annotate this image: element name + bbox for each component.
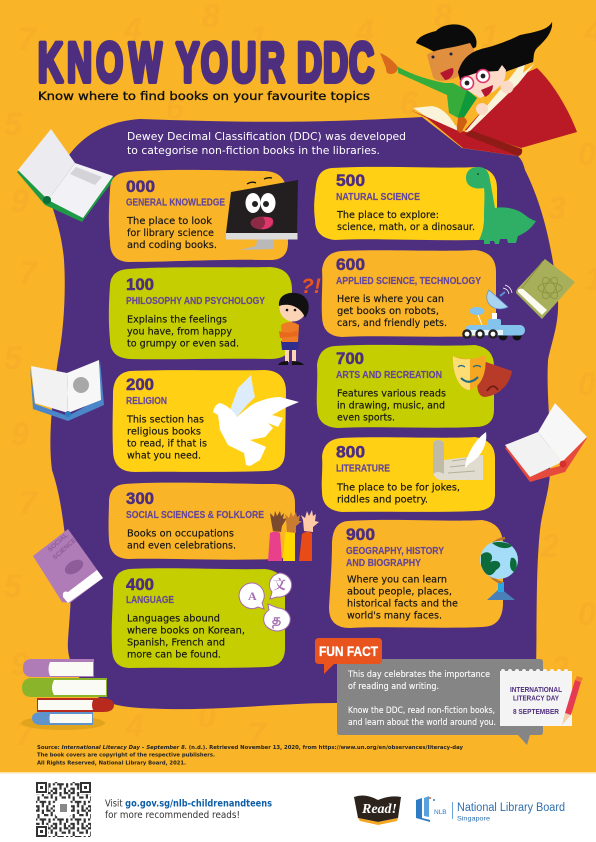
icon: scroll and quill [433, 432, 486, 480]
icon: language speech bubbles: 文 [273, 574, 286, 593]
poster: 6 [166, 90, 184, 126]
icon: thinking boy: ?! [301, 275, 321, 298]
National Library Board logo: National Library Board [457, 802, 565, 814]
card 200 religion: 200 [126, 376, 154, 394]
card 500 natural science: science, math, or a dinosaur. [337, 222, 475, 233]
card 600 applied science, technology: cars, and friendly pets. [337, 318, 447, 329]
icon: red pencil [562, 676, 583, 725]
card 800 literature: The place to be for jokes, [336, 482, 460, 494]
card 800 literature [322, 432, 495, 512]
poster: 5 [4, 106, 23, 142]
card 100 philosophy and psychology: PHILOSOPHY AND PSYCHOLOGY [126, 296, 265, 307]
card 400 language: LANGUAGE [126, 595, 174, 606]
visit text: Visit go.gov.sg/nlb-childrenandteens [105, 798, 272, 810]
card 900 geography, history and biography [329, 520, 518, 628]
card 800 literature: LITERATURE [336, 464, 390, 474]
title: KNOW YOUR DDC [38, 31, 374, 94]
poster: 1 [481, 18, 499, 54]
QR code [36, 782, 92, 838]
card 300 social sciences and folklore: Books on occupations [127, 528, 234, 540]
poster: 4 [125, 708, 144, 744]
Read! logo [354, 796, 401, 825]
card 400 language: where books on Korean, [127, 626, 245, 636]
illustration: blue open book [30, 360, 104, 421]
card 500 natural science: NATURAL SCIENCE [336, 192, 420, 203]
subtitle: Know where to find books on your favourite topics [38, 89, 370, 103]
card 000 general knowledge: GENERAL KNOWLEDGE [126, 198, 225, 208]
card 200 religion: religious books [127, 426, 201, 438]
visit text [105, 798, 272, 821]
card 000 general knowledge: for library science [127, 228, 214, 239]
icon: green dinosaur [466, 167, 536, 244]
illustration: green open book [17, 129, 115, 222]
icon: thinking boy [278, 275, 321, 365]
poster: 9 [11, 183, 29, 219]
Read! logo: Read! [361, 802, 397, 817]
poster: 6 [400, 85, 418, 121]
card 300 social sciences and folklore: 300 [126, 490, 154, 508]
poster: 3 [548, 190, 566, 226]
visit text: for more recommended reads! [105, 810, 240, 821]
illustration: science book [516, 259, 575, 319]
grey fact panel: Know the DDC, read non-fiction books, [348, 706, 495, 716]
poster: 0 [578, 366, 596, 402]
fun fact tag: FUN FACT [319, 643, 378, 659]
intro text: to categorise non-fiction books in the libraries. [127, 145, 380, 157]
card 600 applied science, technology [322, 250, 525, 340]
grey fact panel [337, 659, 543, 745]
card 300 social sciences and folklore: and even celebrations. [127, 540, 236, 552]
card 700 arts and recreation: Features various reads [337, 388, 446, 400]
poster: 7 [16, 716, 36, 752]
card 400 language: Spanish, French and [127, 638, 225, 648]
note: international literacy day: 8 SEPTEMBER [513, 707, 559, 716]
card 800 literature: riddles and poetry. [337, 494, 428, 506]
card 700 arts and recreation: 700 [336, 350, 364, 368]
poster: 0 [198, 698, 216, 734]
note: international literacy day: LITERACY DAY [513, 694, 559, 702]
card 100 philosophy and psychology: to grumpy or even sad. [127, 338, 239, 350]
note: international literacy day [500, 669, 583, 726]
card 000 general knowledge: 000 [126, 178, 155, 196]
card 700 arts and recreation: in drawing, music, and [337, 400, 445, 412]
card 900 geography, history and biography: Where you can learn [347, 574, 447, 586]
card 500 natural science: The place to explore: [336, 210, 439, 221]
poster: 7 [18, 21, 38, 57]
card 000 general knowledge [109, 170, 298, 262]
card 500 natural science [314, 167, 536, 244]
poster: 0 [578, 136, 596, 172]
source credits [37, 745, 464, 766]
National Library Board logo: NLB [434, 809, 447, 816]
poster: 5 [4, 568, 23, 604]
illustration: purple social science book [33, 529, 103, 603]
poster: 1 [249, 20, 267, 56]
illustration: stack of books [21, 659, 114, 730]
card 200 religion [113, 370, 299, 472]
card 400 language: 400 [126, 576, 154, 594]
illustration: purple social science book: SOCIAL [47, 532, 70, 553]
card 900 geography, history and biography: 900 [346, 526, 375, 544]
illustration: children on flying book [380, 22, 577, 156]
source credits: All Rights Reserved, National Library Board, 2021. [37, 760, 186, 766]
poster: 7 [248, 716, 268, 752]
card 200 religion: to read, if that is [127, 438, 207, 450]
note: international literacy day: INTERNATIONAL [510, 685, 562, 694]
card 100 philosophy and psychology: you have, from happy [127, 326, 232, 338]
poster: 5 [4, 340, 23, 376]
poster: 9 [11, 416, 29, 452]
icon: globe [480, 538, 518, 600]
card 700 arts and recreation: ARTS AND RECREATION [336, 370, 442, 381]
card 700 arts and recreation: even sports. [337, 412, 395, 424]
grey fact panel: of reading and writing. [348, 682, 439, 692]
card 300 social sciences and folklore: SOCIAL SCIENCES & FOLKLORE [126, 510, 264, 521]
grey fact panel: This day celebrates the importance [347, 670, 490, 680]
poster: 4 [355, 13, 374, 49]
source credits: Source: International Literacy Day – September 8. (n.d.). Retrieved November 13, 2020, from https://www.un.org/en/observances/literacy-day [37, 745, 464, 751]
card 600 applied science, technology: Here is where you can [337, 294, 444, 305]
card 300 social sciences and folklore [109, 483, 319, 561]
fun fact callout [315, 638, 583, 745]
card 400 language: Languages abound [127, 614, 220, 624]
card 400 language [112, 568, 292, 668]
illustration: red open book [505, 403, 587, 482]
intro text: Dewey Decimal Classification (DDC) was developed [127, 131, 406, 143]
card 000 general knowledge: and coding books. [127, 240, 217, 251]
card 200 religion: This section has [126, 414, 204, 426]
card 900 geography, history and biography: GEOGRAPHY, HISTORY [346, 546, 444, 557]
icon: language speech bubbles [239, 573, 292, 631]
card 600 applied science, technology: 600 [336, 256, 365, 274]
card 100 philosophy and psychology [109, 267, 321, 365]
poster: 7 [19, 255, 39, 291]
illustration: purple social science book: SCIENCE [52, 537, 78, 561]
card 500 natural science: 500 [336, 172, 365, 190]
card 000 general knowledge: The place to look [126, 216, 212, 227]
poster: 0 [578, 596, 596, 632]
card 900 geography, history and biography: AND BIOGRAPHY [346, 558, 421, 569]
poster: 7 [19, 485, 39, 521]
icon: raised hands [268, 510, 319, 561]
grey fact panel: and learn about the world around you. [348, 718, 496, 728]
card 600 applied science, technology: APPLIED SCIENCE, TECHNOLOGY [336, 276, 481, 287]
card 600 applied science, technology: get books on robots, [337, 306, 439, 317]
intro text [127, 131, 406, 157]
card 700 arts and recreation [317, 345, 512, 428]
source credits: The book covers are copyright of the respective publishers. [37, 752, 215, 758]
card 900 geography, history and biography: historical facts and the [347, 598, 458, 610]
National Library Board logo [416, 796, 565, 822]
National Library Board logo: Singapore [457, 816, 490, 822]
poster: 4 [123, 11, 142, 47]
card 200 religion: what you need. [127, 450, 201, 462]
icon: rover with satellite dish [463, 285, 525, 340]
poster: 2 [540, 528, 559, 564]
card 200 religion: RELIGION [126, 396, 167, 407]
icon: white dove [213, 375, 299, 466]
card 100 philosophy and psychology: 100 [126, 276, 154, 294]
card 100 philosophy and psychology: Explains the feelings [127, 314, 227, 326]
purple background blob [50, 117, 558, 709]
card 900 geography, history and biography: world's many faces. [347, 610, 442, 622]
card 900 geography, history and biography: about people, places, [347, 586, 452, 598]
icon: computer monitor [226, 178, 298, 250]
card 800 literature: 800 [336, 444, 365, 462]
poster: 9 [11, 646, 29, 682]
icon: theatre masks [453, 355, 512, 397]
icon: language speech bubbles: த [272, 612, 281, 629]
icon: language speech bubbles: A [248, 589, 257, 603]
poster: 2 [550, 650, 569, 686]
card 400 language: more can be found. [127, 650, 221, 660]
fun fact tag [315, 638, 382, 674]
